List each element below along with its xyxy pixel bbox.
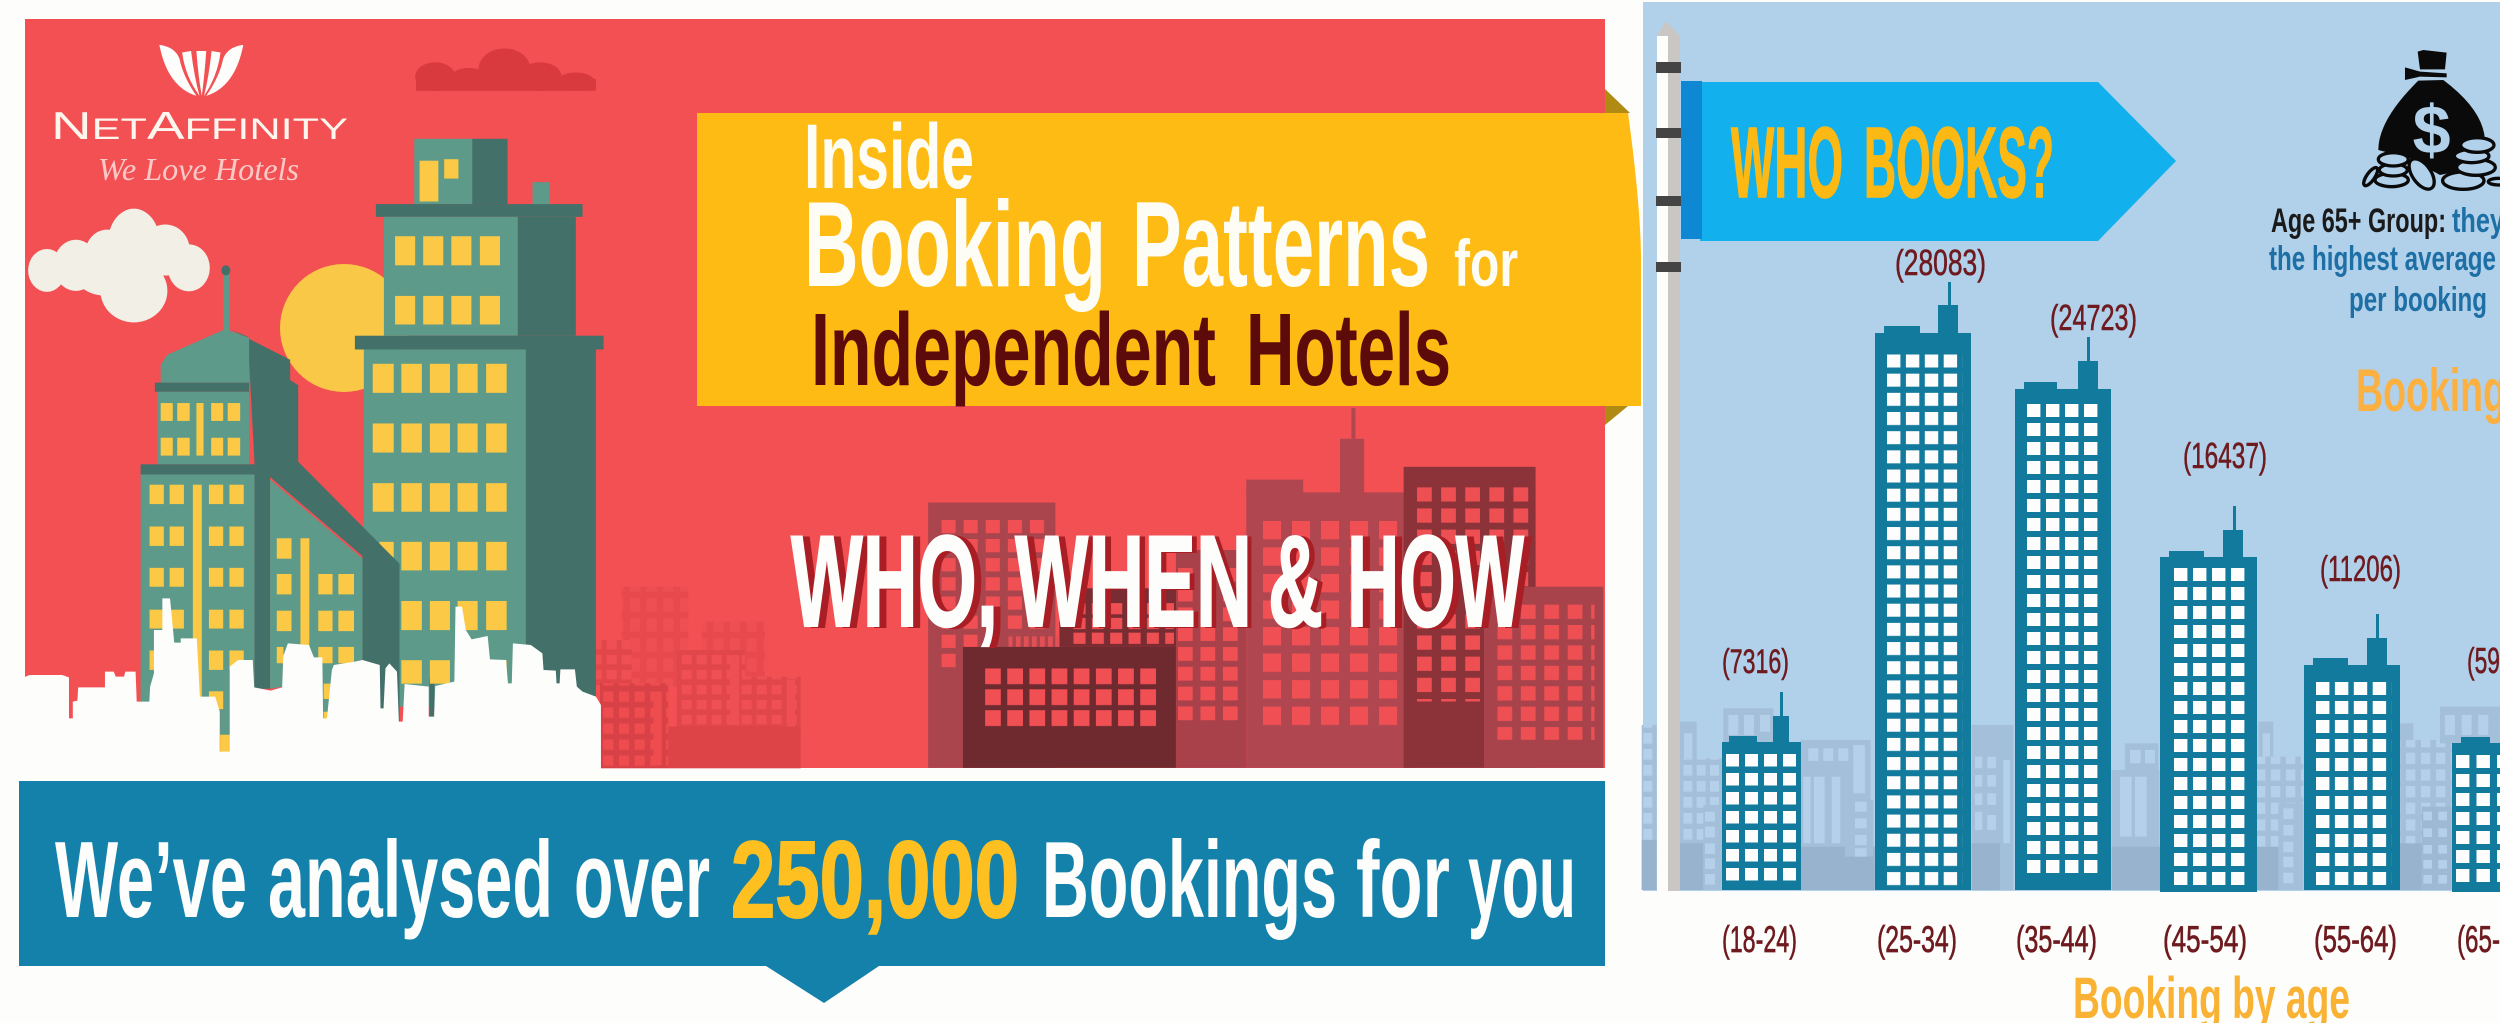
callout text: We’ve [55,819,247,941]
panel: who books: BOOKS? [1864,107,2054,219]
title line: Inside: Inside [804,106,974,208]
bar: 45-54 [2160,435,2267,892]
title word: for: for [1454,226,1518,300]
value label: (7316) [1722,643,1789,681]
faint background city, left half [1642,708,2013,890]
tall green building [355,139,604,719]
dark red foreground skyline [928,408,1603,768]
callout text [55,819,1576,941]
subtitle: WHO, WHEN & HOW: & [1268,508,1323,654]
blue callout bar [19,781,1605,1003]
callout number: 250,000 [731,819,1019,941]
bar: 35-44 [2015,297,2137,890]
age axis labels: (18-24) [1722,919,1797,960]
faint background city, right half [2112,707,2500,890]
white cloud [28,209,210,322]
banner folds [1605,89,1630,113]
value label: (11206) [2320,548,2401,589]
callout text: for [1356,819,1450,941]
bar: 18-24 [1722,643,1802,890]
subtitle: WHO, WHEN & HOW: WHEN [1015,508,1252,654]
flag arrow [1681,81,2176,241]
icon: money bag with coins: $ [2413,92,2451,168]
domed green building [141,265,400,753]
subtitle: WHO, WHEN & HOW [791,508,1531,655]
bar: 55-64 [2304,548,2401,891]
age axis labels: (55-64) [2314,919,2397,960]
value label: (16437) [2183,435,2267,476]
sun [280,264,408,392]
bar: 25-34 [1875,242,1986,890]
subtitle: WHO, WHEN & HOW: WHO, [798,509,1005,655]
faint background buildings [580,587,801,768]
icon: shell logo mark [159,45,243,96]
title banner [697,89,1641,425]
age axis labels: (45-54) [2163,919,2247,960]
white foreground skyline [20,598,601,780]
subtitle: WHO, WHEN & HOW: WHO, [791,508,998,654]
subtitle: WHO, WHEN & HOW: & [1275,509,1328,655]
bar: 65+ [2452,640,2500,892]
icon: money bag with coins [2361,50,2500,194]
age axis labels: (25-34) [1877,919,1957,960]
logo tagline: We Love Hotels [98,151,299,187]
age axis labels: (35-44) [2016,919,2097,960]
title line: Independent Hotels: Hotels [1246,292,1451,407]
hero panel: red city scene [20,19,1605,780]
title line: Independent Hotels: Independent [811,292,1216,407]
callout text: over [574,819,710,941]
flag pole [1656,21,1681,891]
callout text: you [1468,819,1576,941]
banner ribbon [697,113,1641,406]
title line: Booking Patterns: Patterns [1132,176,1430,312]
panel: who books [1642,2,2500,892]
callout text: Bookings [1042,819,1337,941]
value label: (28083) [1895,242,1986,283]
subtitle: WHO, WHEN & HOW: WHEN [1022,509,1256,655]
logo wordmark: N ET A FFINITY [51,105,348,148]
flag heading: WHO [1731,107,1843,219]
title line: Booking Patterns: Booking [804,176,1106,312]
callout: age 65+ note [2269,202,2500,319]
value label: (24723) [2050,297,2137,338]
age axis labels [1722,919,2500,960]
dark cloud [415,48,596,91]
callout text: analysed [268,819,553,941]
subtitle: WHO, WHEN & HOW: HOW [1354,509,1531,655]
logo: NetAffinity [51,45,348,187]
subtitle: WHO, WHEN & HOW: HOW [1347,508,1524,654]
